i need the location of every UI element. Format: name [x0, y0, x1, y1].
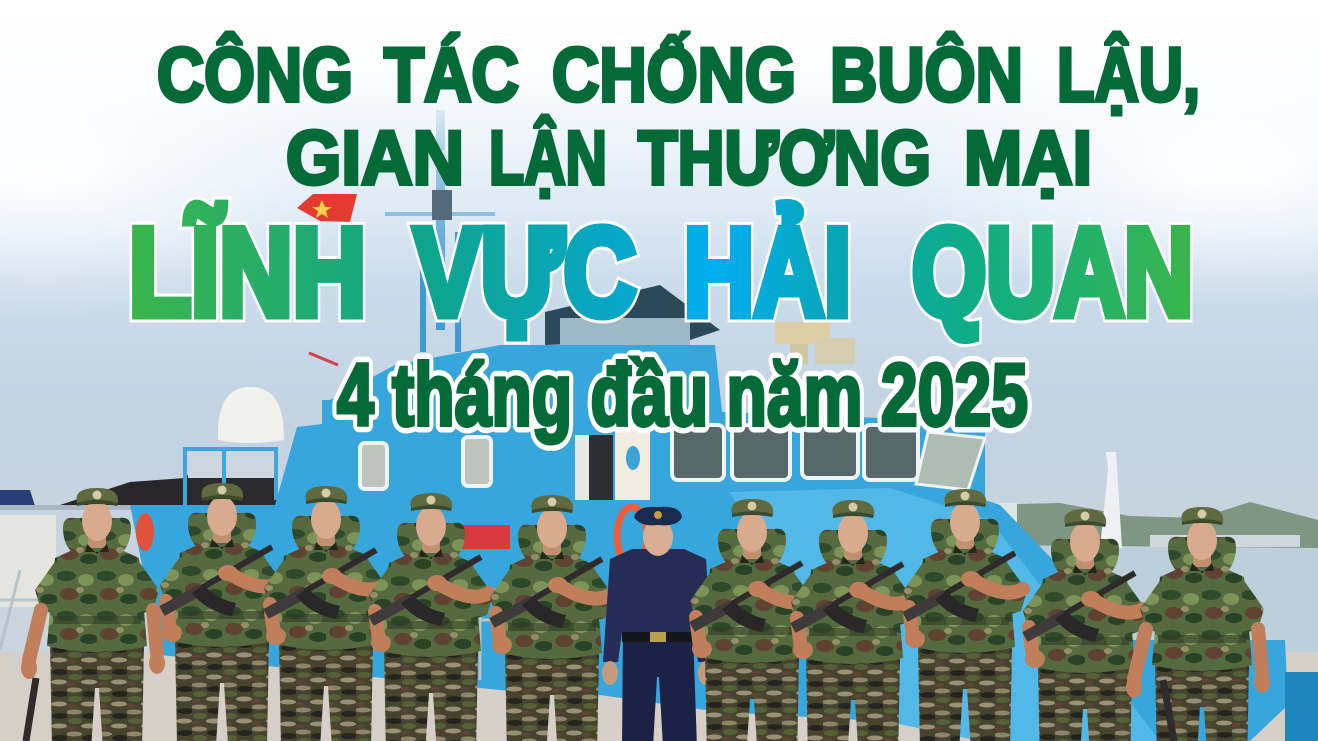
title line 2: GIAN — [286, 116, 464, 201]
main heading — [129, 203, 1193, 342]
soldier 3 — [264, 486, 388, 741]
soldier 6 — [690, 499, 814, 741]
red nameplate — [458, 525, 510, 549]
distant hills and sea — [985, 502, 1318, 670]
main heading: VỰC — [414, 204, 636, 342]
superstructure — [275, 345, 1288, 741]
flag — [297, 194, 357, 222]
lifebuoy right — [617, 507, 647, 565]
cabin door — [575, 428, 650, 500]
deck railing — [0, 570, 600, 680]
top white fade — [0, 0, 1318, 280]
cable car tower — [1100, 452, 1122, 548]
lifebuoy left — [136, 513, 154, 551]
searchlight — [775, 322, 855, 364]
soldier 5 — [490, 495, 614, 741]
title line 1: BUÔN — [830, 33, 1023, 118]
title line 1: CHỐNG — [552, 33, 796, 118]
title block — [129, 32, 1200, 444]
left dockside building and roof — [0, 478, 280, 607]
title line 2: MẠI — [964, 116, 1092, 201]
main heading: QUAN — [912, 204, 1193, 342]
right white glow — [890, 30, 1318, 310]
main heading: VỰC — [414, 204, 636, 342]
wheelhouse windows — [672, 425, 918, 480]
dome support frame — [185, 449, 277, 505]
main heading: HẢI — [684, 203, 851, 342]
carried rifle left — [26, 678, 36, 741]
main heading: HẢI — [684, 203, 851, 342]
title line 1: CÔNG — [157, 33, 353, 118]
right bow fitting — [1285, 672, 1318, 741]
ground — [0, 652, 1318, 741]
title line 2: LẬN — [489, 115, 607, 201]
title line 1: TÁC — [384, 33, 519, 118]
soldier 7 — [791, 500, 915, 741]
soldier 1 — [21, 488, 165, 741]
title line 1 — [157, 32, 1200, 118]
lower hull panel — [730, 488, 1160, 741]
title line 1: LẬU, — [1057, 32, 1200, 118]
subtitle: 4 tháng đầu năm 2025 — [337, 345, 1028, 444]
main heading: LĨNH — [129, 204, 366, 342]
title line 2 — [286, 115, 1092, 201]
cabin side windows — [360, 437, 491, 489]
red antenna — [309, 353, 338, 365]
canopy — [545, 285, 720, 345]
main heading: QUAN — [912, 204, 1193, 342]
main heading: LĨNH — [129, 204, 366, 342]
soldier 10 — [1126, 507, 1270, 741]
title line 2: THƯƠNG — [638, 116, 931, 201]
customs officer in uniform — [602, 507, 714, 741]
carried rifle right — [1163, 680, 1174, 741]
soldier 8 — [903, 489, 1027, 741]
team of officers — [21, 483, 1270, 741]
mast — [385, 110, 495, 352]
left white glow — [0, 20, 370, 320]
slanted side windows — [916, 432, 985, 490]
soldier 4 — [369, 493, 493, 741]
radar dome — [218, 387, 284, 443]
soldier 9 — [1023, 509, 1147, 741]
subtitle: 4 tháng đầu năm 2025 — [337, 345, 1028, 444]
soldier 2 — [160, 483, 284, 741]
